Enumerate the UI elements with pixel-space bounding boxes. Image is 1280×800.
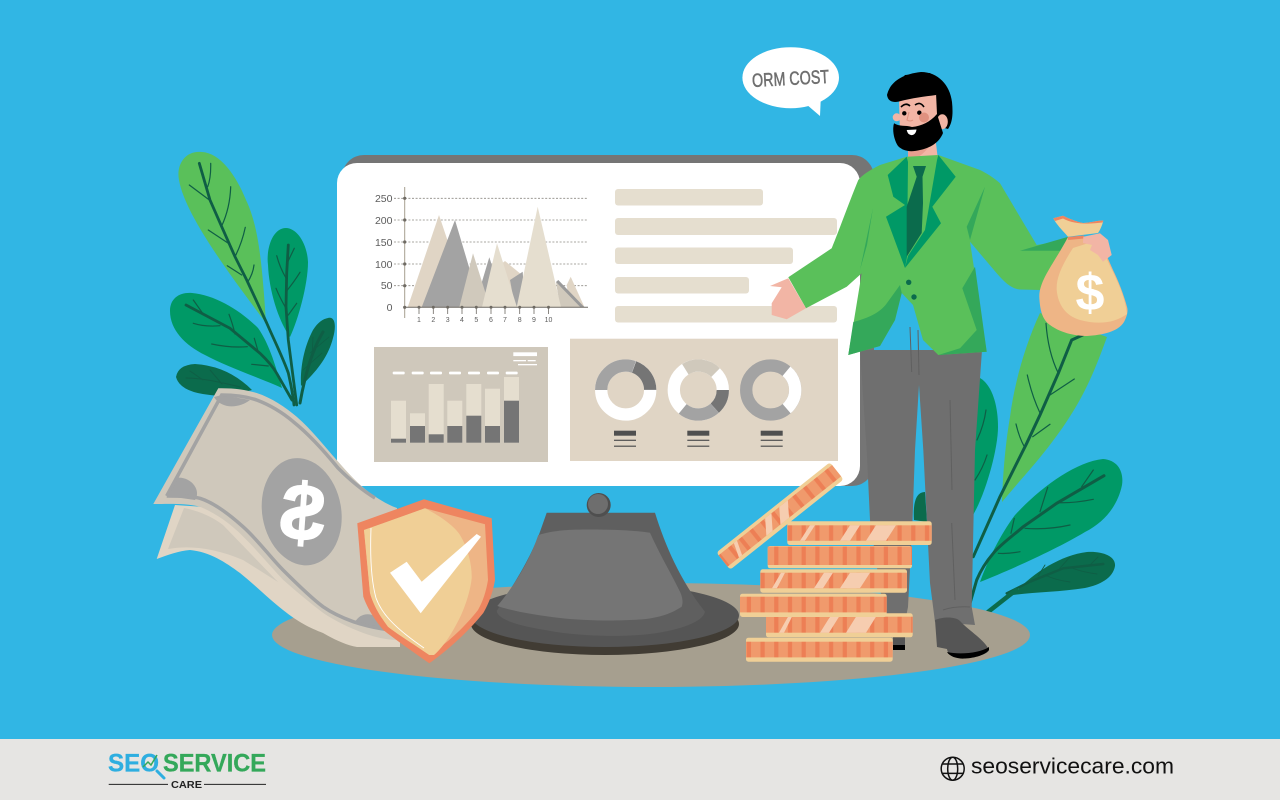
- bill dollar sign: $: [278, 467, 328, 558]
- coin 5: [768, 546, 912, 568]
- check mark: [390, 534, 481, 613]
- donut captions: [614, 431, 783, 447]
- plant veins: [970, 323, 1104, 612]
- leaf: dark lower left: [176, 364, 252, 395]
- leaf: teal right: [980, 459, 1122, 582]
- donut 1: [594, 359, 657, 421]
- icon: globe: [941, 757, 964, 780]
- left shoe: [893, 637, 905, 650]
- banknotes: [153, 388, 400, 647]
- logo magnifier handle: [157, 771, 164, 778]
- donut panel: [570, 339, 838, 461]
- coin stack: [716, 462, 932, 662]
- right plant: [914, 313, 1122, 612]
- coin 2: [766, 613, 913, 637]
- y axis labels: 100: [375, 259, 393, 271]
- x axis labels: 10: [545, 317, 552, 324]
- face: [899, 93, 938, 135]
- leaf: teal upright: [268, 228, 308, 337]
- ground ellipse: [272, 583, 1030, 687]
- cloche knob: [587, 493, 611, 517]
- y axis labels: [375, 193, 393, 314]
- head: [887, 72, 953, 151]
- footer bar: [0, 739, 1280, 800]
- y axis labels: 50: [381, 280, 393, 292]
- jacket: [788, 155, 1068, 355]
- text placeholder bars: [615, 189, 837, 322]
- leaf: dark right: [301, 318, 335, 386]
- hair back: [887, 72, 953, 129]
- logo CARE: CARE: [171, 779, 202, 791]
- logo SEO: SEO: [108, 751, 159, 778]
- x axis labels: 3: [446, 317, 450, 324]
- leaf: dark between legs: [914, 492, 927, 522]
- dollar sign: $: [1076, 264, 1105, 322]
- plant veins: [186, 163, 329, 405]
- leaf: teal behind leg: [960, 378, 998, 520]
- chart grid: [394, 198, 588, 286]
- cheek: [919, 112, 929, 122]
- trousers: [860, 327, 982, 625]
- left plant: [170, 152, 335, 405]
- cloche: [471, 493, 739, 655]
- coin 4: [760, 569, 907, 593]
- leaf: light green: [1002, 313, 1107, 502]
- x axis labels: [417, 317, 552, 324]
- bag top: [1053, 216, 1103, 237]
- x axis labels: 5: [474, 317, 478, 324]
- beard: [893, 114, 943, 151]
- money bag: [1039, 216, 1128, 336]
- hair front: [887, 73, 942, 102]
- falling coin: [716, 462, 844, 570]
- coin 3: [740, 594, 887, 617]
- white dashes and legend: [393, 352, 537, 374]
- y axis labels: 150: [375, 237, 393, 249]
- y axis labels: 200: [375, 215, 393, 227]
- ears: [937, 114, 948, 129]
- monitor screen: [337, 163, 860, 486]
- cloche highlight: [497, 530, 683, 620]
- mouth: [907, 130, 916, 135]
- plate: [471, 593, 739, 655]
- speech bubble: [742, 47, 839, 116]
- donut 3: [736, 355, 805, 425]
- bars light: [391, 377, 519, 443]
- area chart: [375, 187, 588, 324]
- mountains: [408, 207, 584, 307]
- x axis labels: 2: [431, 317, 435, 324]
- logo: [108, 751, 266, 791]
- bill oval: [253, 452, 350, 572]
- shield: [357, 499, 495, 663]
- leaf: dark lower: [1013, 552, 1115, 595]
- x axis labels: 4: [460, 317, 464, 324]
- logo chart line: [143, 755, 157, 767]
- x axis labels: 6: [489, 317, 493, 324]
- chart axes: [404, 187, 588, 318]
- y axis labels: 250: [375, 193, 393, 205]
- eyes and brows: [902, 111, 906, 116]
- neck: [908, 135, 938, 168]
- shield light facet: [364, 508, 472, 655]
- right shoe: [935, 618, 989, 659]
- coin 6: [787, 521, 932, 545]
- nose: [907, 112, 913, 121]
- buttons: [906, 280, 911, 285]
- y axis labels: 0: [387, 302, 393, 314]
- man: [770, 72, 1128, 659]
- bubble text: ORM COST: [752, 67, 830, 92]
- x axis labels: 8: [518, 317, 522, 324]
- x axis labels: 7: [503, 317, 507, 324]
- logo SERVICE: SERVICE: [163, 751, 266, 778]
- leaf: light green: [178, 152, 266, 323]
- website: seoservicecare.com: [971, 754, 1174, 778]
- cloche body: [497, 513, 705, 636]
- bag tie: [1068, 237, 1084, 238]
- lapels: [886, 157, 908, 268]
- hand pointing: [770, 278, 806, 319]
- tie: [907, 166, 926, 257]
- jacket shadows: [848, 285, 902, 355]
- bill inner border: [167, 395, 390, 630]
- hand on bag: [1083, 233, 1112, 262]
- back bill: [157, 505, 400, 647]
- shirt: [905, 160, 937, 260]
- coin 1: [746, 638, 893, 662]
- bars dark: [391, 401, 519, 443]
- x axis labels: 9: [532, 317, 536, 324]
- bar chart panel: [374, 347, 548, 462]
- monitor: [337, 155, 874, 486]
- front bill: [153, 388, 400, 640]
- donut 2: [664, 355, 733, 425]
- bill corner marks: [214, 395, 250, 406]
- x axis labels: 1: [417, 317, 421, 324]
- leaf: teal left: [170, 293, 282, 388]
- monitor back: [342, 155, 874, 486]
- axis dots: [403, 197, 550, 309]
